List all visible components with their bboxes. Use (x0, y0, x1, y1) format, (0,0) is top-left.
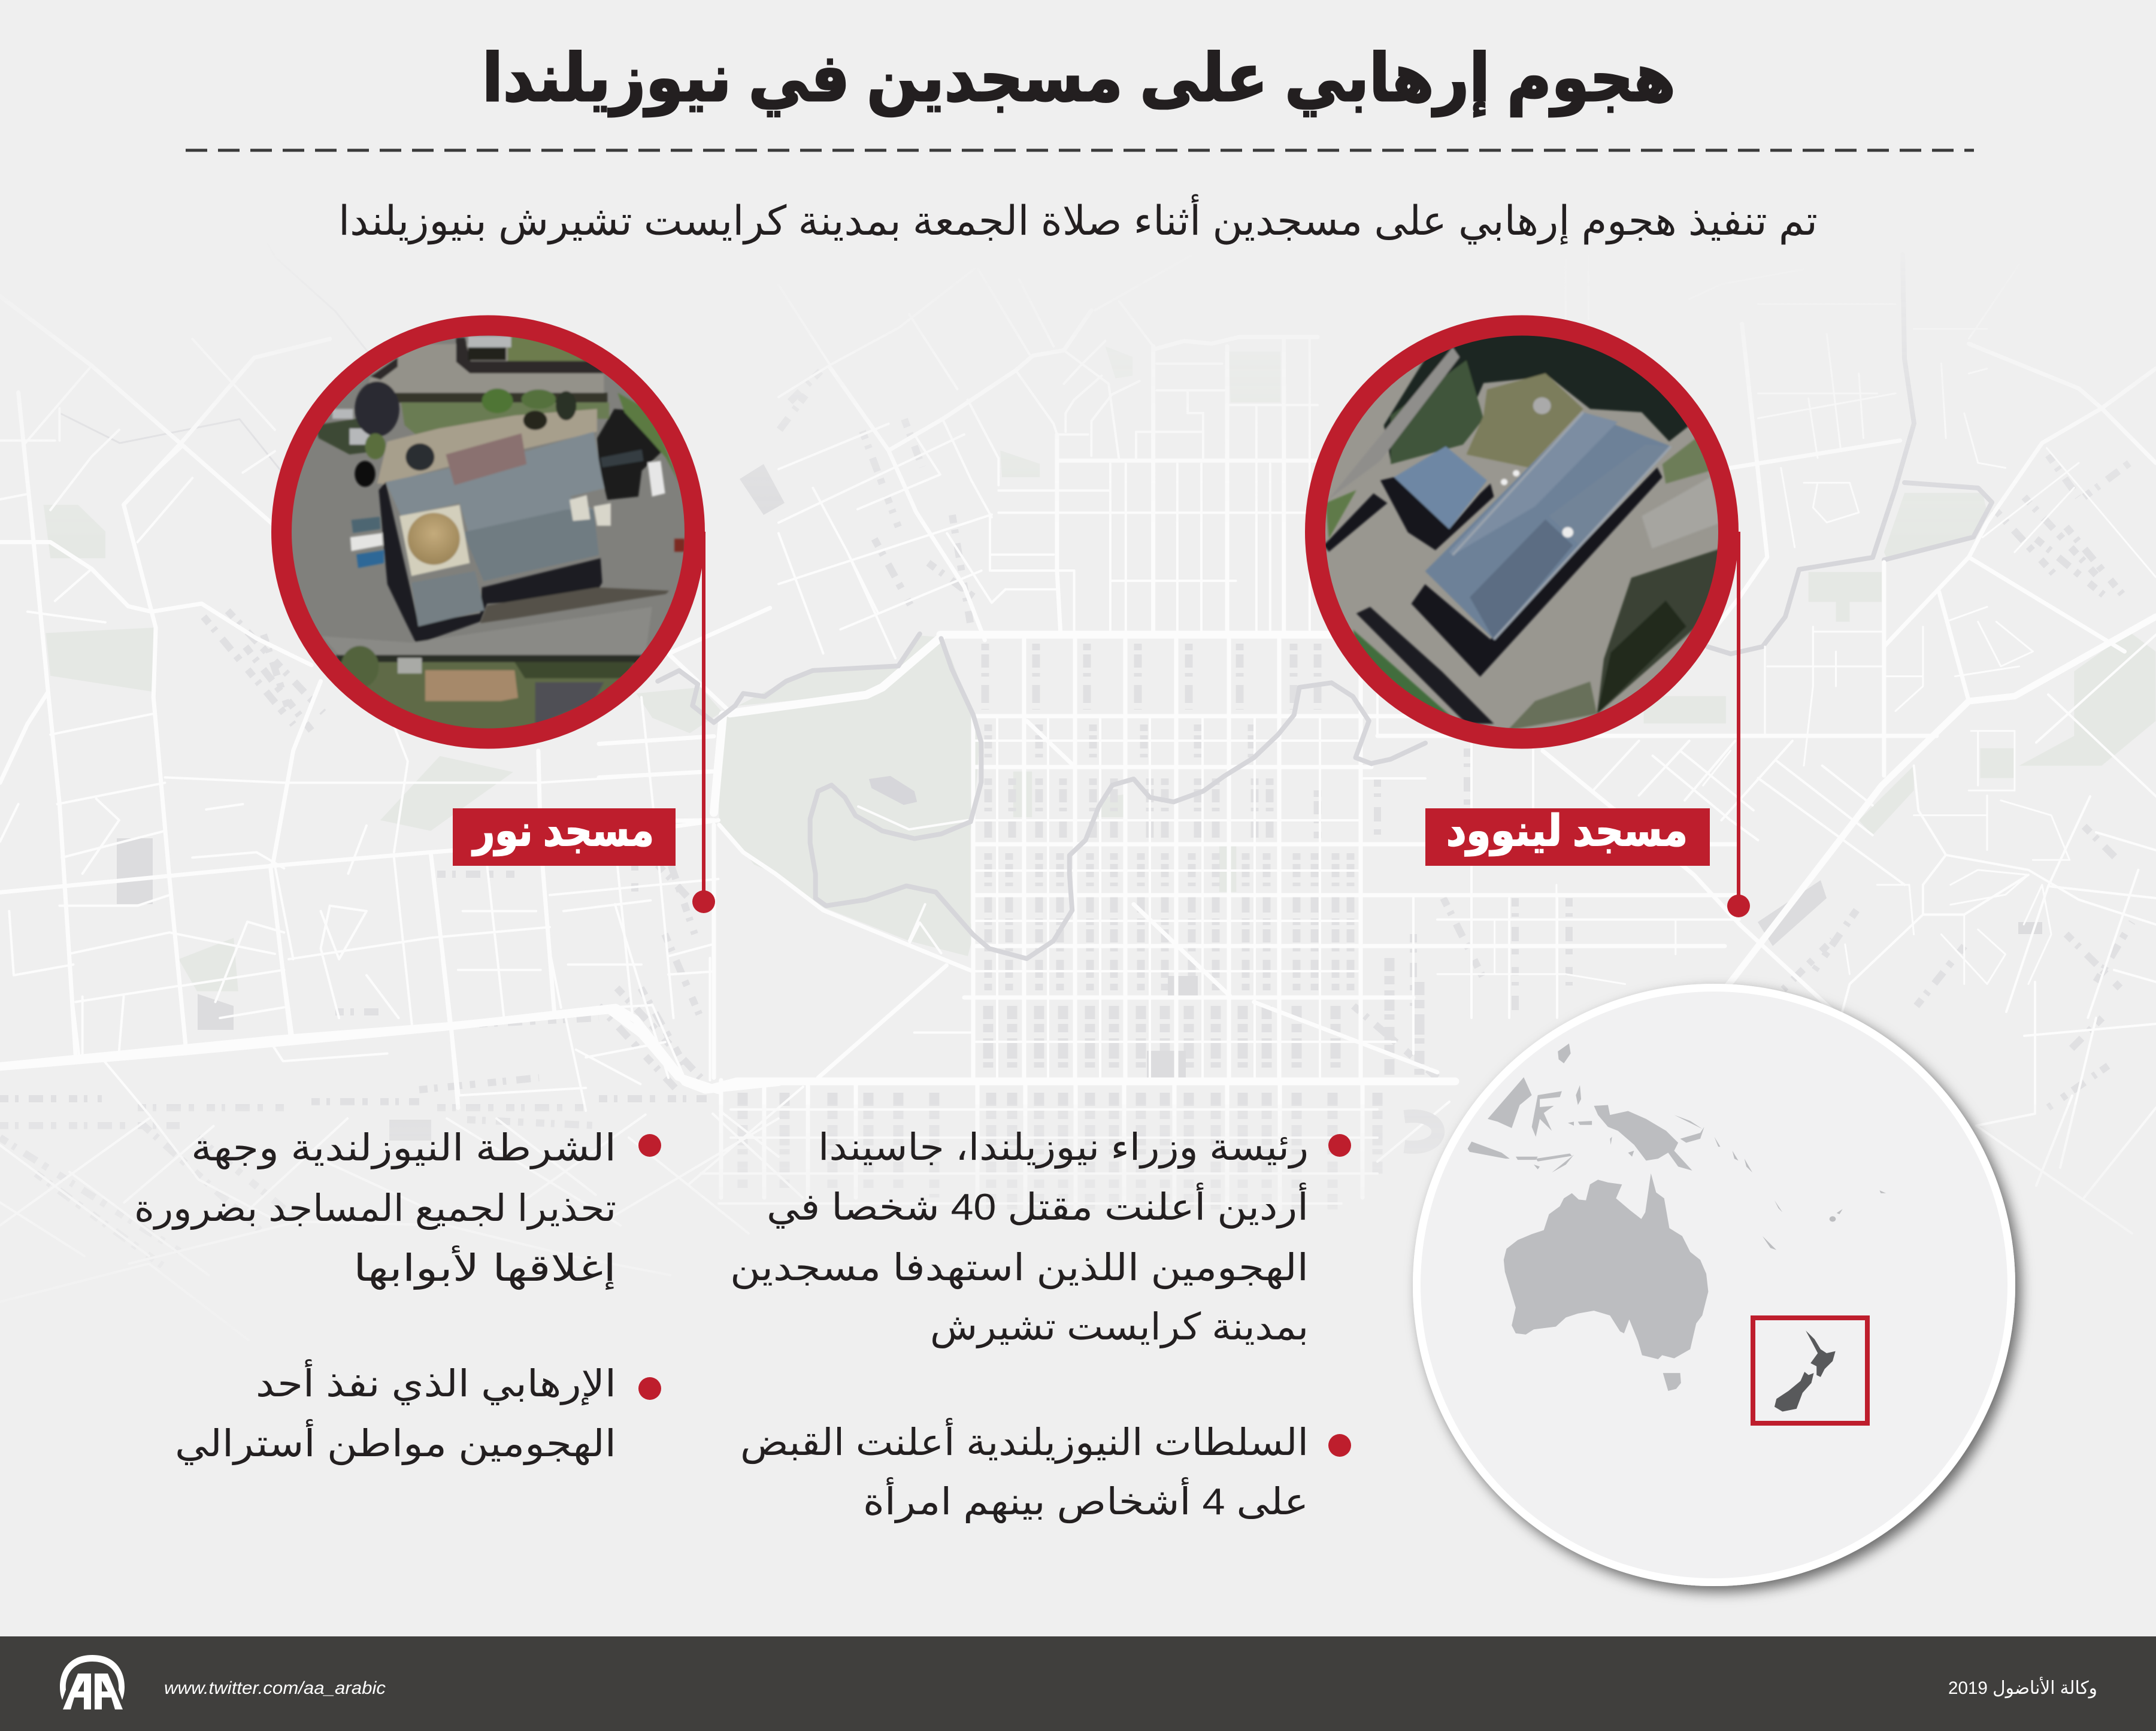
footer bar (0, 1636, 2156, 1731)
panel: location map of Oceania (1413, 984, 2015, 1586)
leader line and pin (1727, 532, 1750, 917)
panel: Noor mosque callout (281, 323, 715, 913)
red ring (281, 326, 695, 739)
label: Noor mosque: مسجد نور (471, 807, 654, 856)
panel: Linwood mosque callout (1315, 323, 1750, 917)
text block: Linwood bullets: الهجومين اللذين استهدفا مسجدين (730, 1247, 1309, 1290)
footer link text: www.twitter.com/aa_arabic (164, 1678, 386, 1698)
text block: Linwood bullets: السلطات النيوزيلندية أعلنت القبض (740, 1418, 1309, 1464)
text block: Linwood bullets (730, 1127, 1351, 1524)
aerial photo: Linwood mosque (1318, 323, 1737, 742)
title: هجوم إرهابي على مسجدين في نيوزيلندا (482, 41, 1676, 117)
text block: Noor bullets: الهجومين مواطن أسترالي (175, 1419, 616, 1466)
text block: Noor bullets: الشرطة النيوزلندية وجهة (191, 1127, 616, 1170)
map: Australia and neighbours (1468, 1044, 1886, 1391)
text block: Noor bullets: تحذيرا لجميع المساجد بضرورة (134, 1188, 616, 1230)
red ring (1315, 326, 1728, 739)
text block: Noor bullets: إغلاقها لأبوابها (353, 1245, 616, 1290)
red highlight box (1753, 1318, 1867, 1423)
leader line and pin (692, 532, 715, 913)
text block: Linwood bullets: رئيسة وزراء نيوزيلندا، جاسيندا (818, 1127, 1309, 1169)
text block: Linwood bullets: بمدينة كرايست تشيرش (930, 1306, 1309, 1348)
label: Linwood mosque: مسجد لينوود (1446, 807, 1688, 856)
copyright text: وكالة الأناضول 2019 (1948, 1676, 2097, 1699)
text block: Noor bullets: الإرهابي الذي نفذ أحد (256, 1359, 616, 1406)
subtitle: تم تنفيذ هجوم إرهابي على مسجدين أثناء صلاة الجمعة بمدينة كرايست تشيرش بنيوزيلندا (338, 194, 1818, 245)
map: New Zealand highlighted (1775, 1330, 1836, 1411)
background street map (0, 323, 2156, 1187)
text block: Linwood bullets: على 4 أشخاص بينهم امرأة (863, 1477, 1309, 1524)
text block: Linwood bullets: أردين أعلنت مقتل 40 شخصا في (767, 1183, 1309, 1229)
icon: AA logo (60, 1655, 125, 1709)
text block: Noor bullets (134, 1127, 661, 1466)
aerial photo: Noor mosque (281, 323, 701, 742)
